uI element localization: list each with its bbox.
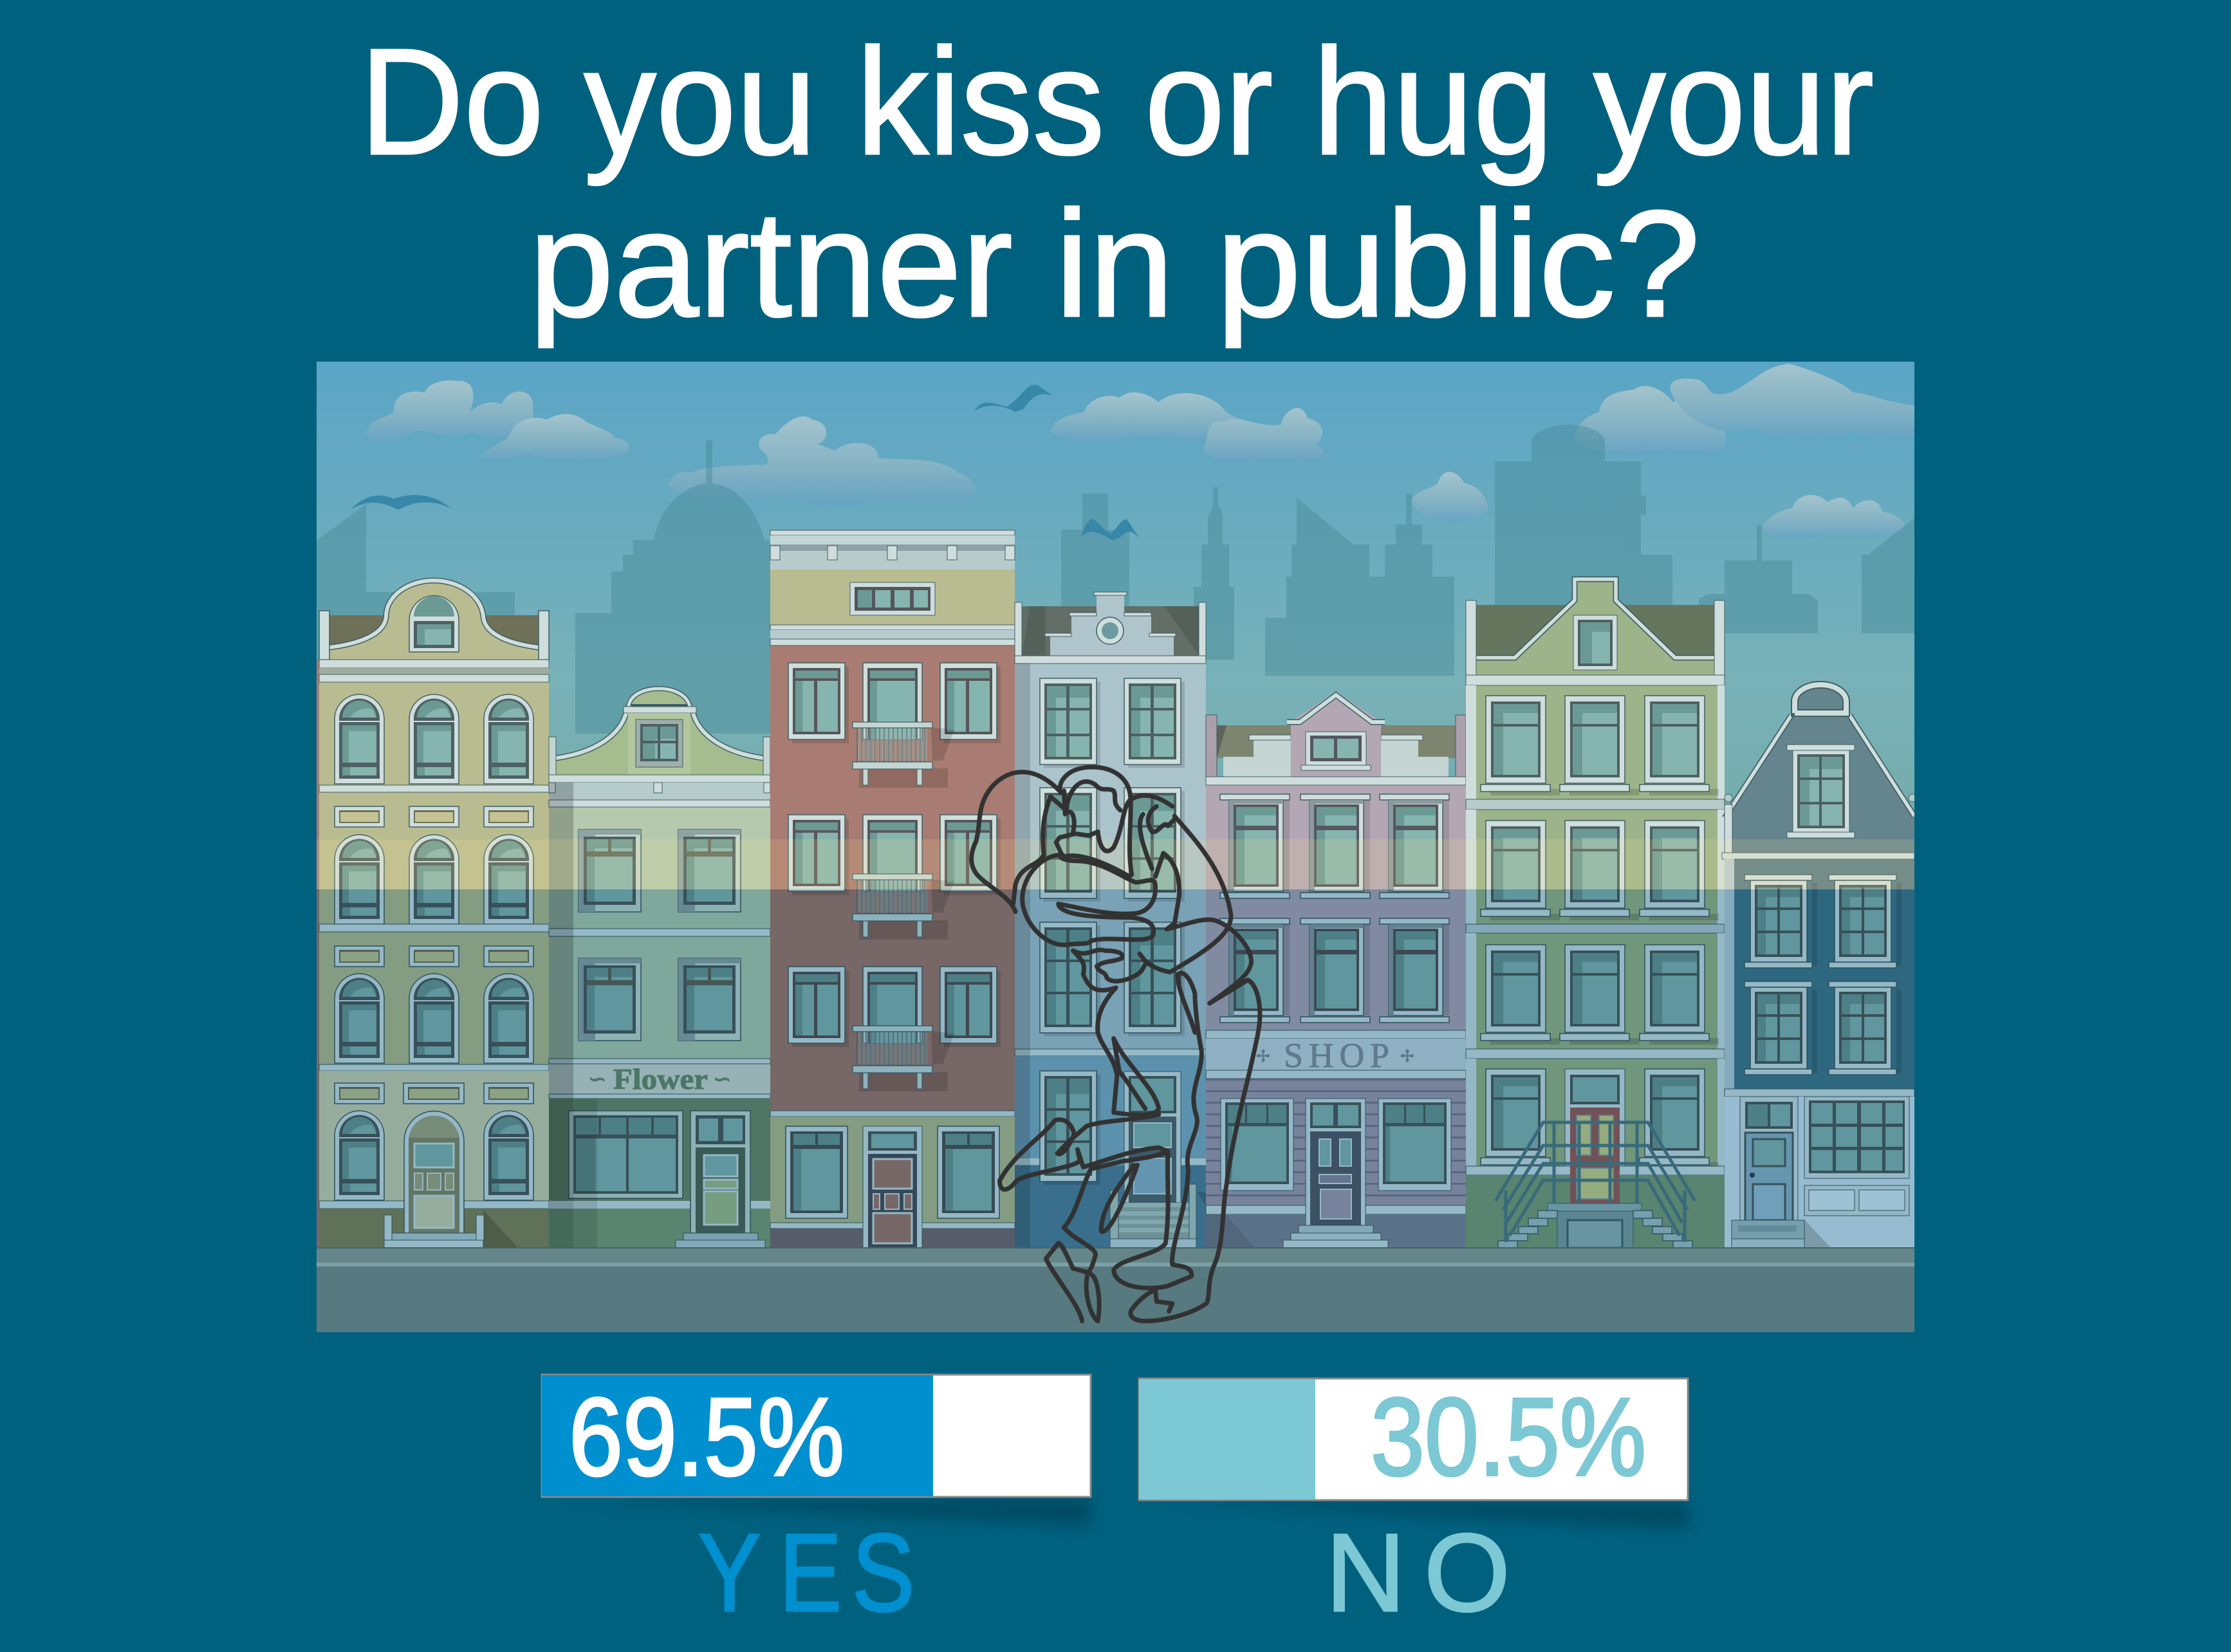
pavement — [317, 1247, 1914, 1333]
no bar 30.5%: 30.5% — [1371, 1375, 1646, 1499]
line drawing: embracing couple — [972, 767, 1260, 1321]
bar shadow: no — [1158, 1501, 1688, 1528]
shop sign: Flower — [590, 1068, 730, 1090]
shop sign: Flower: Flower — [613, 1063, 708, 1095]
shop sign: Flower: ∽ — [713, 1068, 731, 1091]
sunlit band across the facades — [317, 839, 1914, 889]
shop sign: Flower: ∽ — [588, 1068, 606, 1091]
title: partner in public? — [529, 179, 1700, 348]
building: yellow arched house — [317, 580, 549, 1248]
label: no: NO — [1326, 1511, 1510, 1635]
no bar 30.5% — [1139, 1375, 1688, 1500]
shop sign: SHOP: SHOP — [1284, 1036, 1389, 1075]
sky — [317, 362, 1914, 811]
building: dark blue gabled house — [1722, 685, 1916, 1248]
city skyline silhouette — [317, 425, 1914, 734]
building: red tall house — [770, 530, 1015, 1248]
building: green flower shop — [549, 689, 770, 1248]
bar shadow: yes — [553, 1498, 1091, 1525]
clouds — [366, 364, 1914, 539]
blue tint over the lower facades — [317, 889, 1914, 1248]
label: yes: YES — [698, 1511, 914, 1635]
title: Do you kiss or hug your — [360, 17, 1874, 186]
shop sign: SHOP — [1256, 1044, 1414, 1068]
shop sign: SHOP: ✢ — [1400, 1047, 1414, 1066]
title — [360, 17, 1874, 348]
yes bar 69.5% — [542, 1375, 1091, 1499]
birds — [351, 385, 1140, 541]
street illustration — [317, 362, 1916, 1333]
shop sign: SHOP: ✢ — [1256, 1047, 1270, 1066]
building: large green house with stairs — [1466, 578, 1725, 1248]
building: grey-blue stepped house — [1014, 592, 1206, 1247]
yes bar 69.5%: 69.5% — [569, 1375, 844, 1499]
building: pink shop house — [1206, 692, 1466, 1248]
infographic canvas — [317, 43, 1914, 1613]
